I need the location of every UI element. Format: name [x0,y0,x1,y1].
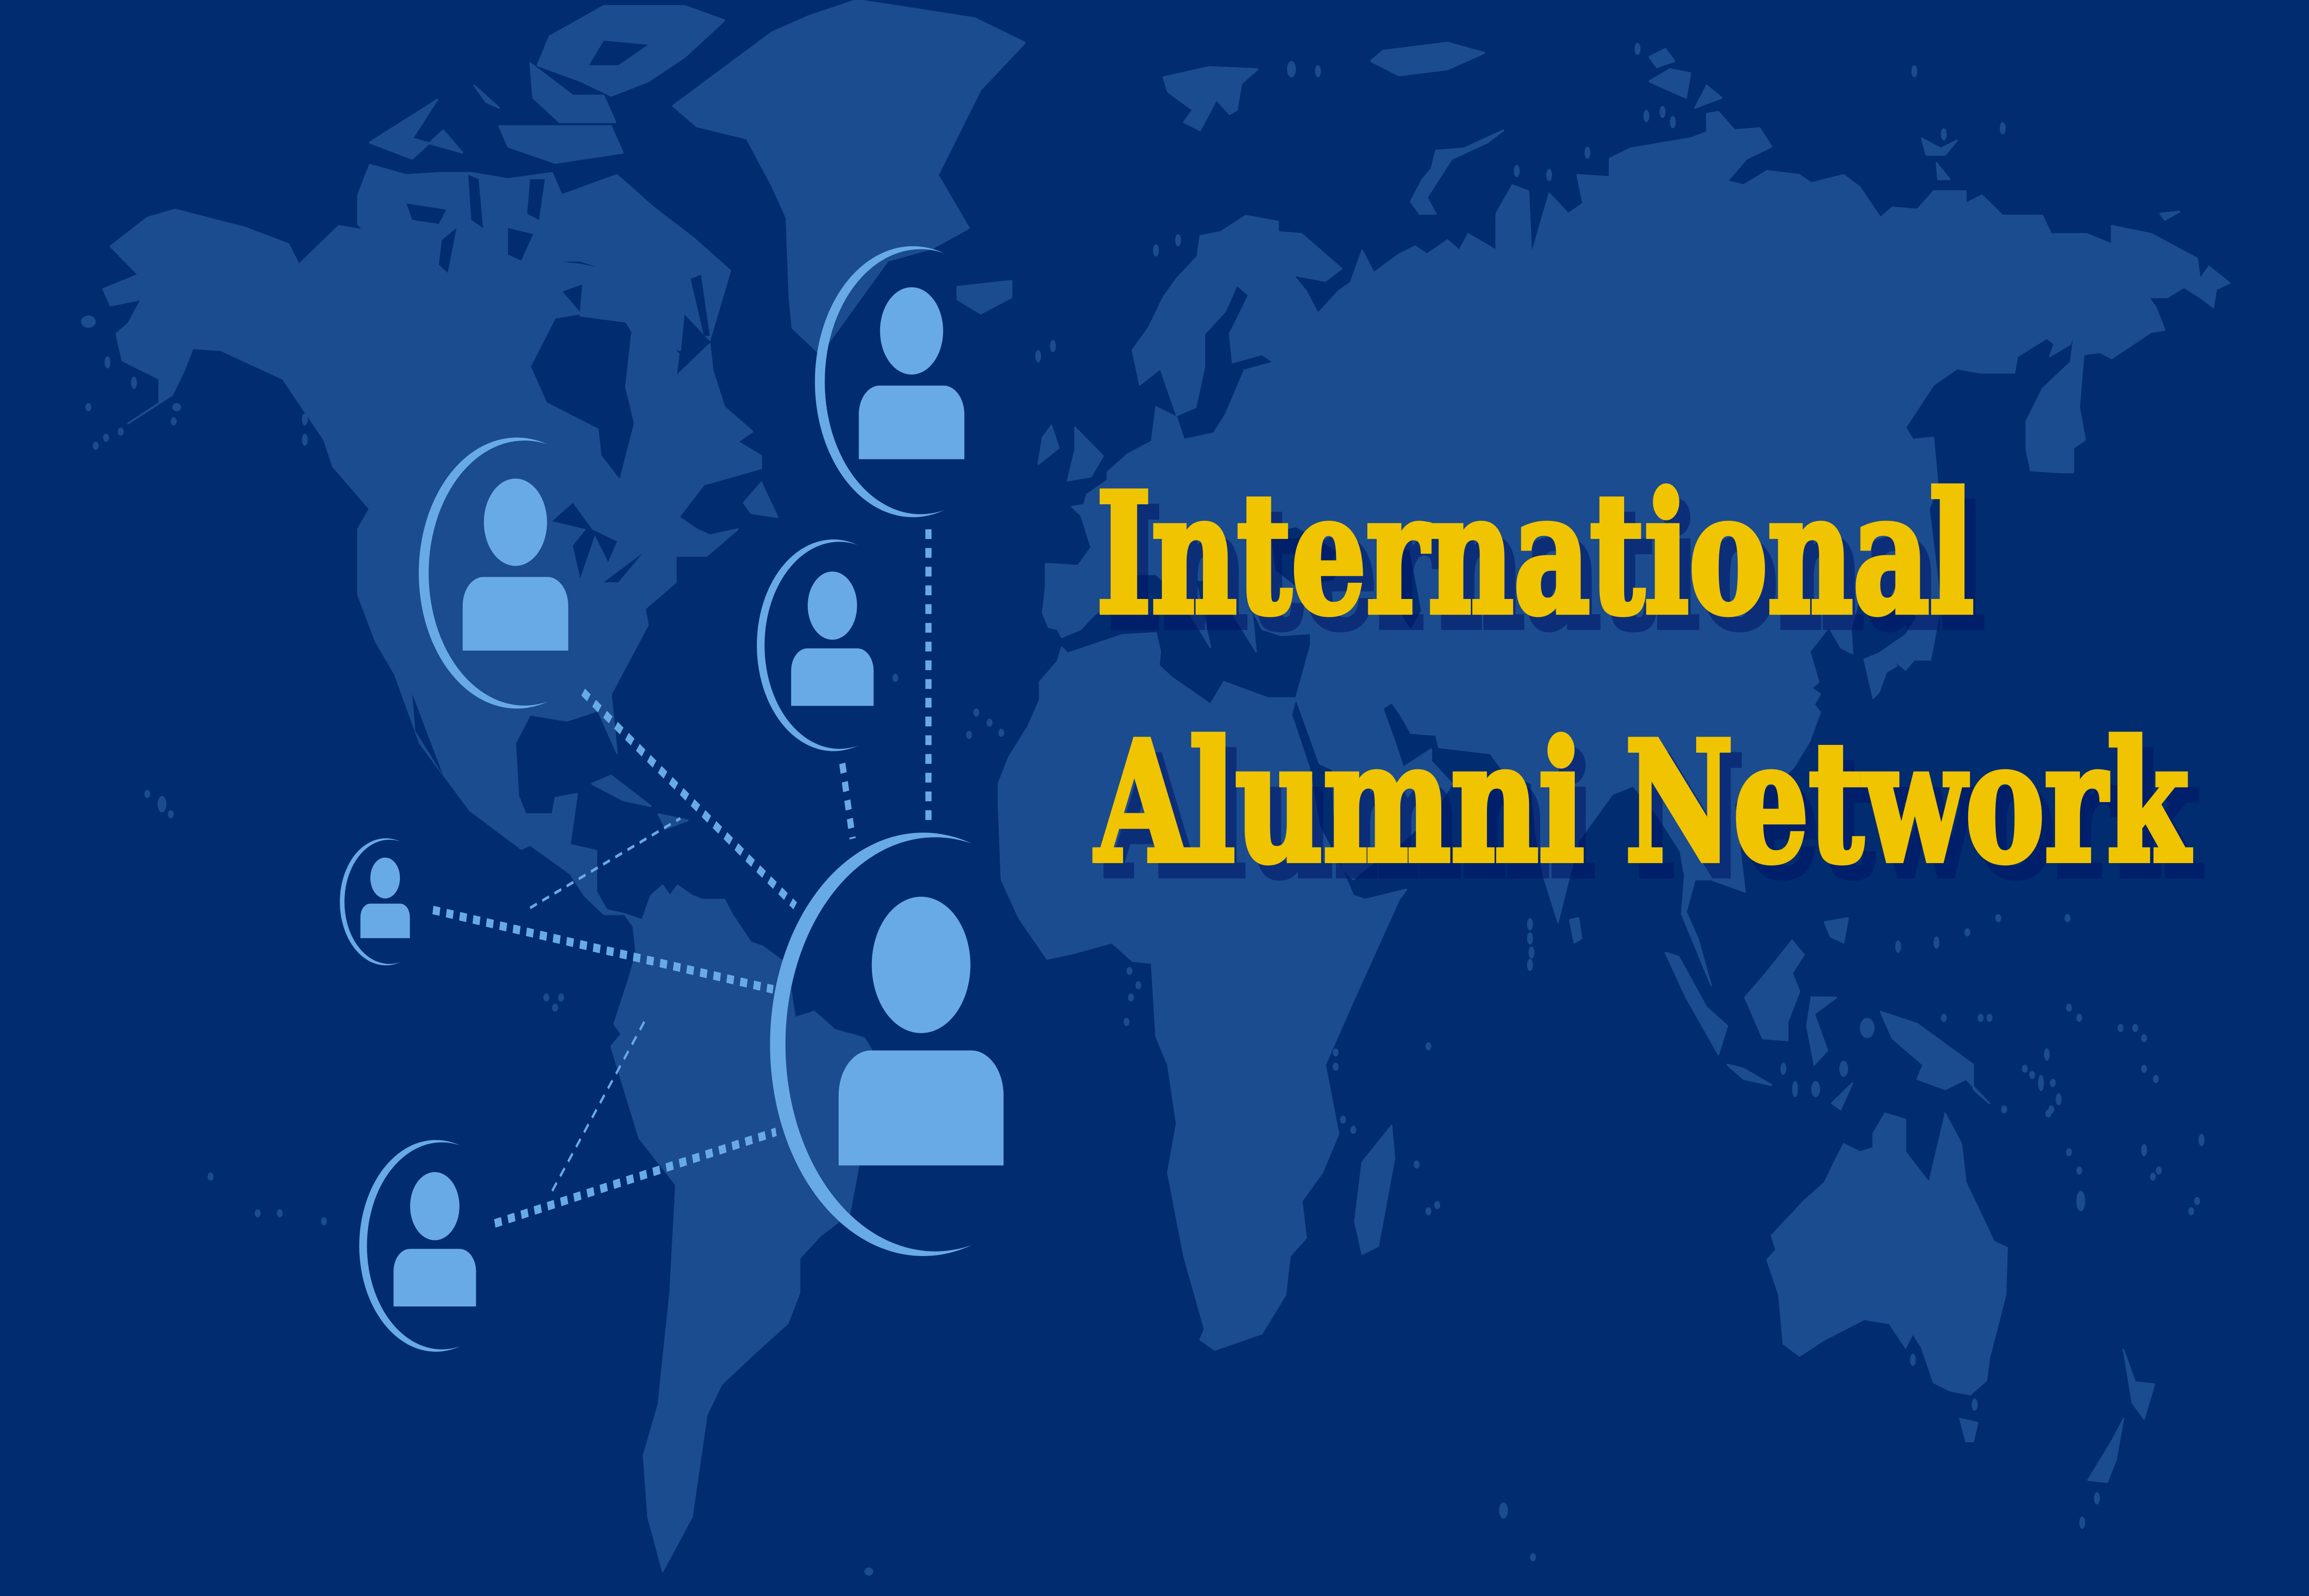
title shadow: International [1107,472,1985,666]
icon: person lower left [359,1140,476,1352]
americas [103,0,1025,1572]
title [1094,457,2192,899]
icon: person top [815,246,964,517]
title shadow [1105,472,2203,914]
title shadow: Network [1636,721,2203,914]
lakes and bays [406,41,710,776]
icon: main person [770,833,1003,1256]
icon: person north america [419,437,568,708]
connector: dotted lines to main person [433,529,929,1223]
inland seas [1271,527,1421,629]
eurasia africa australia [998,43,2230,1482]
icon: person small left [340,838,410,965]
title: Network [1625,706,2192,899]
icon: person middle [757,539,874,751]
connector: thin dashed lines [530,818,680,1191]
title shadow: Alumni [1105,721,1596,914]
title: Alumni [1094,706,1584,899]
title: International [1096,457,1974,651]
